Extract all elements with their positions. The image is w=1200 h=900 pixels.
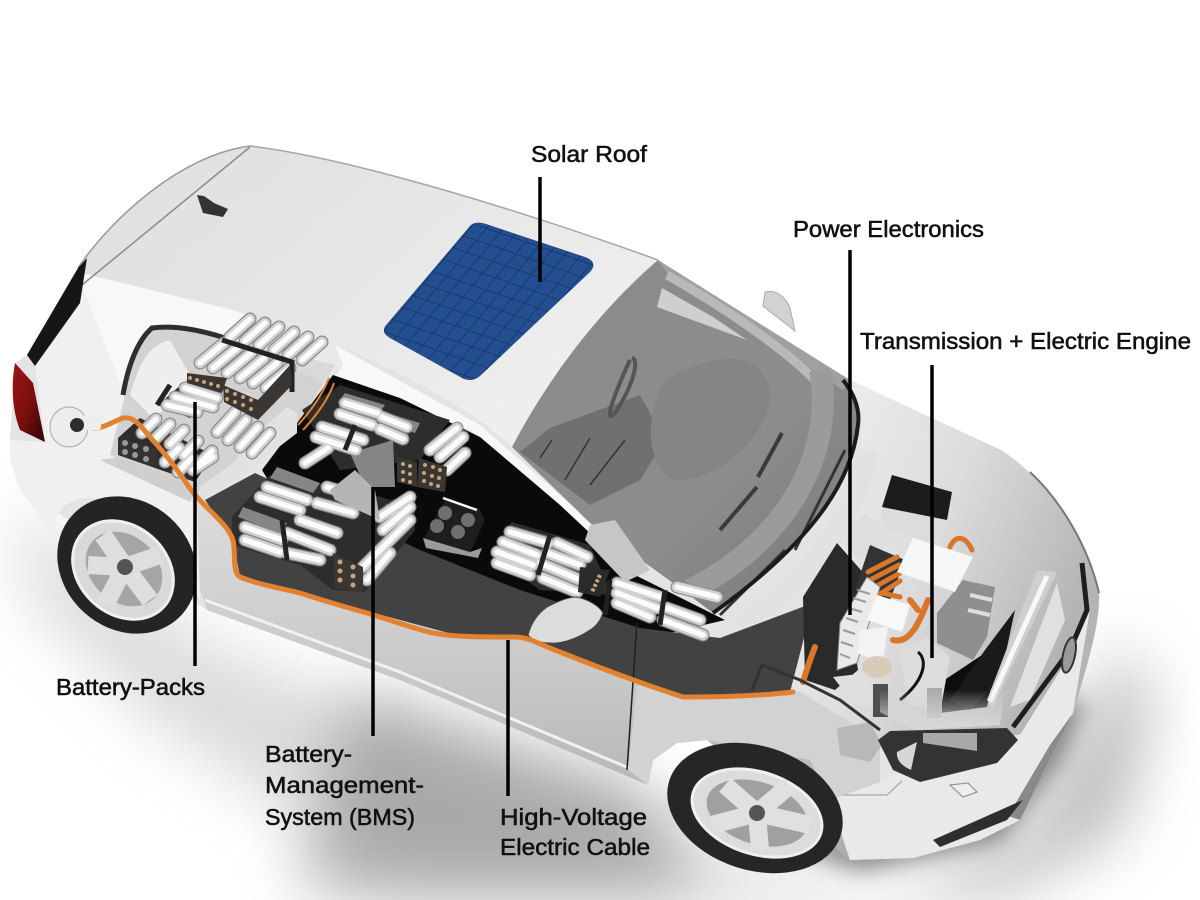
radiator tube [987, 570, 1057, 707]
charging port [50, 407, 101, 447]
label: Battery-Management-System (BMS): Battery- [265, 741, 352, 767]
icon: VW badge [1059, 636, 1079, 674]
battery cells: shadow [142, 319, 717, 635]
orange coil pipes [868, 538, 972, 597]
pillar tube [667, 275, 815, 380]
white block [867, 595, 910, 632]
seat [520, 395, 665, 505]
grey cylinder [927, 688, 942, 718]
lower side panel [170, 497, 880, 860]
fender seam [843, 781, 902, 795]
windshield and cabin [512, 260, 868, 630]
roof edge [250, 146, 658, 260]
washer cap [950, 783, 977, 797]
dark pack frames [118, 383, 612, 595]
label: High-Voltage Electric Cable [500, 804, 650, 860]
dark rear cavity [940, 643, 1000, 713]
end cap lower [333, 553, 363, 593]
bumper [830, 610, 1090, 860]
white A-pillar [735, 450, 868, 630]
end cap front [578, 567, 610, 597]
fin lines [840, 590, 870, 658]
icon: rear hatch window slit [27, 258, 87, 366]
label: High-Voltage Electric Cable: High-Voltage [500, 804, 647, 830]
housing [878, 728, 1018, 782]
dark cavity behind radiator [950, 610, 1015, 710]
white lower block [857, 627, 888, 663]
steering wheel [610, 358, 635, 416]
engine bay [752, 475, 1065, 762]
battery management system box [423, 498, 485, 558]
end cap rear left [118, 438, 157, 467]
dashboard band [690, 370, 823, 590]
dark cylinder [873, 684, 888, 717]
grey lids [238, 393, 420, 533]
chrome lens [897, 742, 917, 770]
window frame [123, 327, 225, 395]
dashboard vents [720, 433, 782, 530]
battery cells: body [142, 319, 717, 635]
underbody bracket [752, 665, 880, 730]
rear tray [197, 407, 297, 497]
shoulder highlight [82, 273, 600, 535]
rear hatch seam [82, 147, 250, 285]
side window pale strip [657, 288, 747, 340]
icon: shark fin antenna [197, 195, 228, 217]
battery cells: highlight [142, 319, 717, 635]
label: Battery-Management-System (BMS) [265, 741, 424, 830]
icon: tail light [13, 363, 45, 442]
label: Battery-Management-System (BMS): System (BMS) [265, 804, 415, 830]
rear quarter panel [10, 285, 200, 600]
dark wiring [855, 545, 905, 600]
inverter cover [897, 538, 973, 592]
bumper side shadow [1008, 713, 1073, 820]
compressor [837, 722, 882, 762]
rear hatch edge [78, 146, 250, 268]
base plate [833, 673, 877, 707]
hood fade [880, 690, 1005, 730]
fog light slot [933, 800, 1023, 847]
headlight [878, 728, 1018, 782]
black cavity [262, 375, 725, 640]
label: High-Voltage Electric Cable: Electric Cable [500, 834, 650, 860]
label: Battery-Packs: Battery-Packs [56, 674, 205, 700]
high-voltage orange cable [93, 418, 793, 697]
end cap rear top [187, 373, 227, 393]
label: Power Electronics: Power Electronics [793, 216, 984, 242]
icon: wing mirror [763, 292, 795, 331]
front wheel [650, 721, 860, 895]
orange motor pipes [803, 600, 928, 682]
electric motor cylinder [900, 637, 950, 713]
spokes [712, 785, 810, 850]
rim [53, 500, 193, 640]
coolant reservoir [845, 515, 895, 560]
hub bolts [117, 559, 133, 575]
car battery top [882, 475, 952, 520]
motor mount [330, 470, 380, 520]
glass area [512, 260, 858, 613]
grille line [1013, 563, 1087, 727]
windshield frame [713, 380, 858, 613]
side tray [100, 457, 197, 502]
ground shadow [15, 500, 1150, 895]
label: Battery-Management-System (BMS): Management- [265, 772, 424, 798]
hub [749, 805, 765, 821]
leader lines [195, 177, 932, 796]
roof panel [78, 146, 658, 447]
rim inner [71, 516, 177, 622]
radiator highlight [990, 576, 1047, 702]
wiper [720, 450, 845, 615]
end cap rear right [223, 365, 292, 420]
rim [681, 753, 833, 873]
front fender [628, 685, 880, 800]
sill highlight [205, 600, 648, 776]
black hose [900, 652, 923, 700]
hood outer edge [1030, 472, 1099, 593]
label: Solar Roof: Solar Roof [531, 141, 648, 167]
heat sink [937, 580, 995, 660]
car body [10, 146, 1099, 860]
floor [205, 473, 813, 697]
round cap [862, 656, 892, 678]
end caps middle [397, 457, 447, 492]
body silhouette [10, 146, 1099, 860]
finned motor housing [837, 577, 880, 670]
door seam [627, 623, 637, 770]
translucent chassis bracket [585, 520, 650, 582]
opening interior [110, 327, 335, 497]
rim inner [698, 767, 816, 859]
car battery body [882, 507, 947, 545]
solar roof panel [384, 223, 593, 380]
rear wheel [29, 468, 225, 662]
door mirror [528, 597, 603, 643]
transparent body over top pack [225, 313, 343, 385]
inner light [130, 340, 190, 420]
heat sink fins [968, 595, 992, 615]
battery packs [118, 319, 717, 635]
dark interior [100, 375, 813, 697]
hood [790, 380, 1099, 740]
radiator fins [1010, 583, 1065, 707]
rear side window opening [110, 327, 335, 497]
label: Transmission + Electric Engine: Transmission + Electric Engine [860, 328, 1191, 354]
side cable [298, 378, 334, 430]
pack bands [157, 340, 665, 625]
tyre [650, 721, 860, 895]
dark left cavity [803, 543, 867, 690]
reflector [923, 733, 977, 751]
tyre [29, 468, 225, 662]
spokes [88, 535, 160, 605]
dashboard dome [651, 359, 770, 480]
upper pillar band [658, 260, 850, 390]
seat stitching [540, 438, 625, 485]
